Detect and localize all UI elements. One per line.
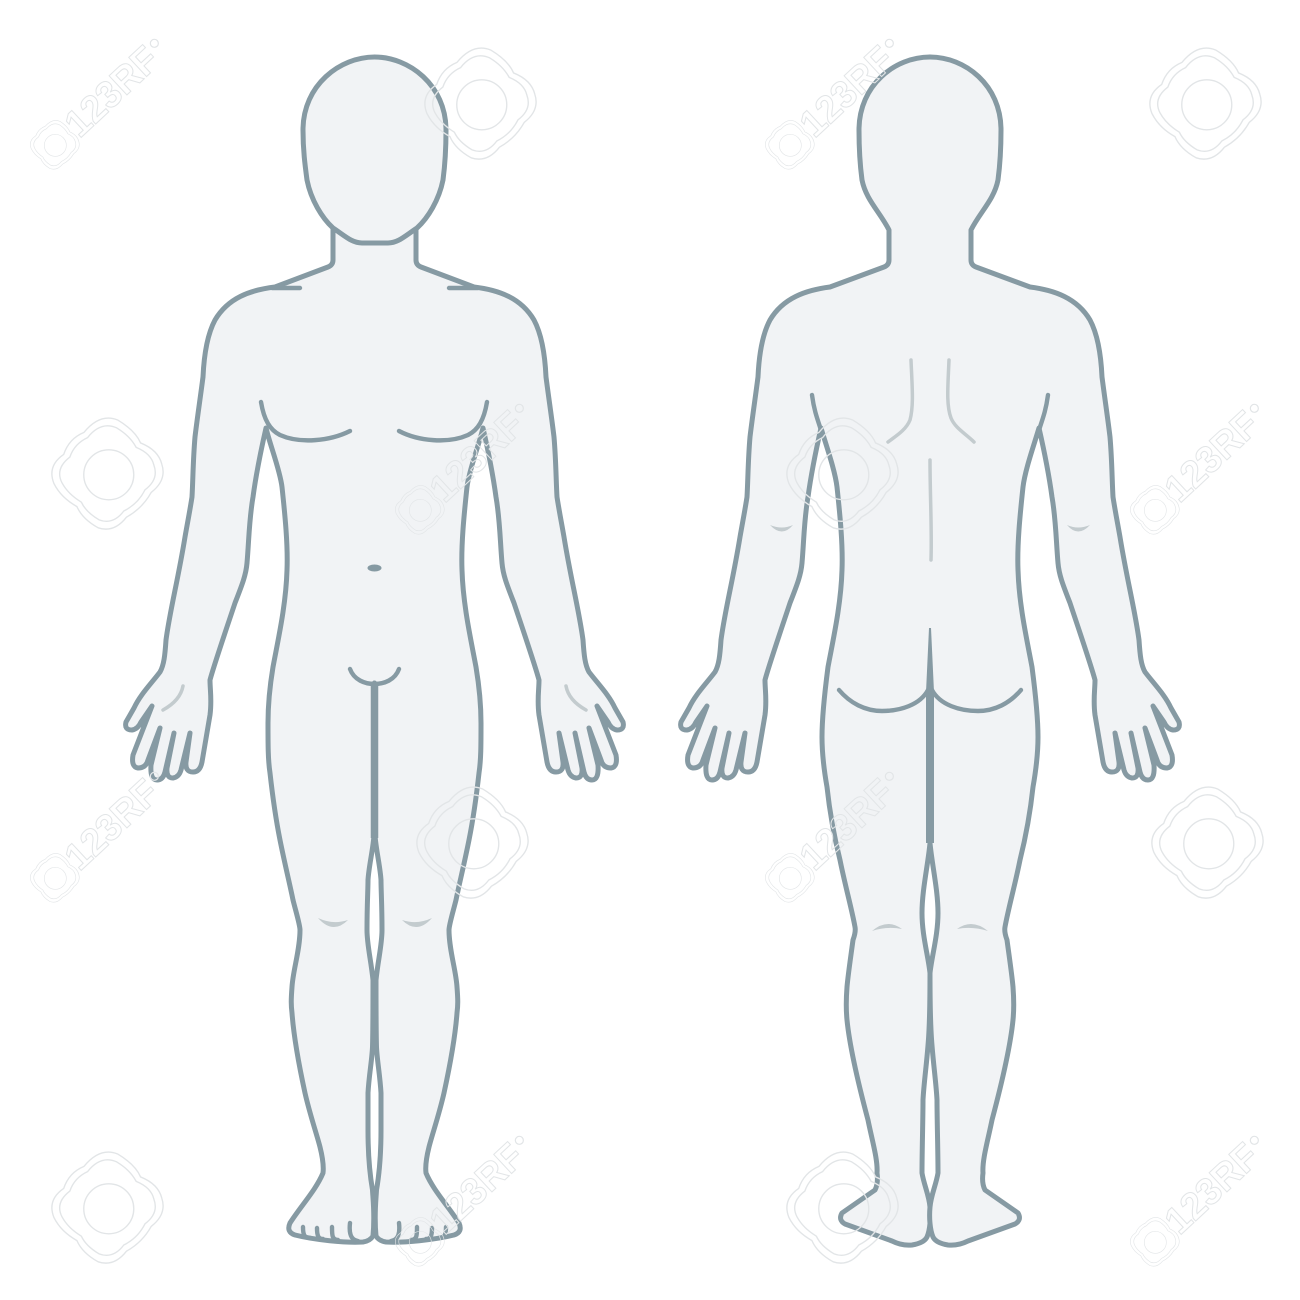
front body: left half bbox=[126, 228, 374, 1242]
watermark logo 5: 123RF bbox=[57, 772, 168, 879]
watermark logo 2 bbox=[760, 30, 911, 175]
watermark egg 2 bbox=[1138, 35, 1273, 170]
watermark logo 1: 123RF bbox=[57, 39, 168, 146]
watermark logo 7 bbox=[390, 1127, 541, 1272]
elbow lines bbox=[770, 525, 1090, 532]
watermark egg 5 bbox=[405, 774, 540, 909]
back cleft and thigh line bbox=[926, 628, 934, 843]
watermark egg 4 bbox=[775, 405, 910, 540]
watermark logo 2: 123RF bbox=[792, 39, 903, 146]
back knee lines bbox=[872, 924, 988, 931]
watermark logo 3 bbox=[390, 395, 541, 540]
watermark egg 6 bbox=[1140, 774, 1275, 909]
palm creases bbox=[163, 686, 586, 710]
watermark logo 6: 123RF bbox=[792, 772, 903, 879]
front centre thigh line bbox=[371, 683, 378, 838]
watermark logo 5 bbox=[25, 763, 176, 908]
watermark logo 4: 123RF bbox=[1157, 404, 1268, 511]
spine line bbox=[930, 460, 931, 560]
watermark egg 3 bbox=[40, 405, 175, 540]
toes bbox=[303, 1223, 446, 1241]
watermark logo 8: 123RF bbox=[1157, 1136, 1268, 1243]
watermark logo 6 bbox=[760, 763, 911, 908]
watermark logo 7: 123RF bbox=[422, 1136, 533, 1243]
clavicle lines bbox=[272, 286, 478, 290]
front body: right half bbox=[374, 228, 623, 1242]
watermark logo 8 bbox=[1125, 1127, 1276, 1272]
shoulder blade lines bbox=[888, 360, 974, 442]
watermark logo 4 bbox=[1125, 395, 1276, 540]
figure: back view bbox=[681, 57, 1179, 1245]
front head bbox=[303, 57, 446, 243]
chest lines bbox=[261, 402, 487, 440]
watermark egg 1 bbox=[413, 35, 548, 170]
watermark egg 7 bbox=[40, 1139, 175, 1274]
watermark logo 3: 123RF bbox=[422, 404, 533, 511]
knee lines bbox=[318, 918, 432, 927]
back armpit lines bbox=[812, 395, 1048, 430]
figure: front view bbox=[126, 57, 623, 1242]
groin line bbox=[350, 669, 399, 684]
watermark logo 1 bbox=[25, 30, 176, 175]
back body: right half bbox=[930, 57, 1179, 1245]
buttock lines bbox=[839, 690, 1021, 711]
back body: left half bbox=[681, 57, 930, 1245]
navel bbox=[368, 564, 382, 572]
front torso centre fill bbox=[333, 225, 416, 690]
watermark egg 8 bbox=[775, 1139, 910, 1274]
